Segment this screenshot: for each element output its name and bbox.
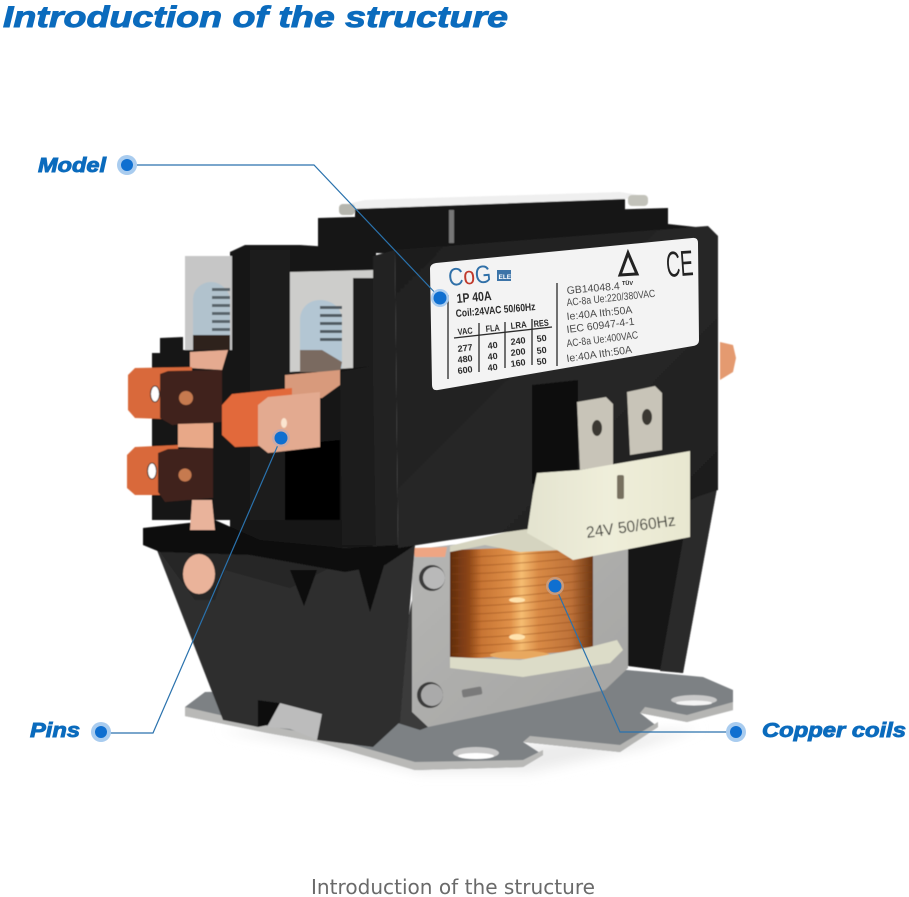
top housing cap bbox=[318, 192, 705, 254]
right copper nub bbox=[720, 342, 736, 380]
rating table bbox=[448, 283, 557, 379]
rear screw terminal bbox=[185, 256, 232, 351]
rating table: 50 bbox=[536, 356, 547, 367]
lower bobbin flange bbox=[450, 640, 623, 677]
rating table: FLA bbox=[485, 323, 501, 334]
cream coil bobbin bbox=[527, 451, 690, 560]
main front column bbox=[373, 250, 398, 548]
upper bobbin band bbox=[450, 525, 560, 552]
rating table: RES bbox=[533, 317, 549, 329]
rating table: 50 bbox=[536, 333, 547, 344]
standards text: IEC 60947-4-1 bbox=[566, 316, 635, 336]
brand badge bbox=[497, 270, 512, 281]
pins marker bbox=[91, 722, 111, 742]
lamination stack bbox=[388, 595, 428, 730]
product label bbox=[430, 238, 699, 390]
brand badge: ELE bbox=[498, 274, 512, 281]
rating table: 240 bbox=[510, 335, 526, 347]
pins label: Pins bbox=[30, 720, 80, 742]
rating table: 40 bbox=[487, 340, 498, 351]
coils leader line bbox=[555, 586, 729, 732]
copper pins rear bbox=[127, 350, 228, 530]
copper pin front bbox=[222, 370, 340, 453]
TUV mark: TÜV bbox=[622, 280, 633, 287]
contactor body bbox=[127, 192, 736, 770]
copper coil winding bbox=[450, 545, 593, 660]
contactor product photo bbox=[127, 192, 736, 772]
rear left black block bbox=[152, 337, 230, 520]
left side housing bbox=[155, 545, 415, 747]
rear black column bbox=[230, 245, 376, 548]
rating table: 277 bbox=[457, 342, 473, 354]
TUV mark bbox=[620, 253, 637, 287]
model text: 1P 40A bbox=[456, 288, 493, 306]
rating table: 40 bbox=[487, 362, 498, 373]
coil rating text: Coil:24VAC 50/60Hz bbox=[455, 301, 536, 320]
flange bbox=[143, 520, 415, 572]
standards text: AC-8a Ue:220/380VAC bbox=[566, 288, 656, 309]
coils target marker bbox=[546, 577, 564, 595]
rating table: 40 bbox=[487, 351, 498, 362]
standards text: Ie:40A Ith:50A bbox=[566, 304, 633, 323]
callout: copper coils bbox=[546, 577, 906, 742]
main black face bbox=[395, 226, 718, 548]
rating table: 160 bbox=[510, 357, 526, 369]
recess for coil terminals bbox=[532, 380, 578, 484]
model target marker bbox=[431, 289, 449, 307]
model marker bbox=[117, 155, 137, 175]
label plate bbox=[430, 238, 699, 390]
callout: pins bbox=[30, 429, 290, 742]
ground shadow bbox=[220, 728, 700, 772]
rating table: 50 bbox=[536, 345, 547, 356]
pins target marker bbox=[272, 429, 290, 447]
standards text: GB14048.4 bbox=[566, 280, 620, 297]
standards text: AC-8a Ue:400VAC bbox=[566, 329, 639, 350]
front screw terminal bbox=[290, 270, 373, 372]
coil spade terminals bbox=[577, 386, 662, 470]
steel frame bbox=[412, 530, 628, 727]
coils marker bbox=[726, 722, 746, 742]
model leader line bbox=[137, 165, 440, 298]
CE mark: CE bbox=[665, 242, 694, 285]
rating table: 480 bbox=[457, 353, 473, 365]
standards text: Ie:40A Ith:50A bbox=[566, 344, 633, 365]
rating table: LRA bbox=[510, 319, 528, 331]
right leg bbox=[628, 488, 717, 673]
base plate bbox=[185, 670, 733, 770]
pins leader line bbox=[108, 438, 281, 733]
copper pin tab below flange bbox=[183, 554, 215, 594]
brand logo: CoG bbox=[447, 260, 492, 292]
standards text bbox=[566, 280, 656, 365]
rating table: 200 bbox=[510, 346, 526, 358]
model label: Model bbox=[38, 155, 107, 177]
title: Introduction of the structure bbox=[3, 1, 508, 34]
callout: model bbox=[38, 155, 449, 307]
rating table: VAC bbox=[457, 325, 474, 337]
coils label: Copper coils bbox=[762, 720, 906, 742]
bobbin rating text: 24V 50/60Hz bbox=[585, 513, 677, 542]
rating table: 600 bbox=[457, 364, 473, 376]
